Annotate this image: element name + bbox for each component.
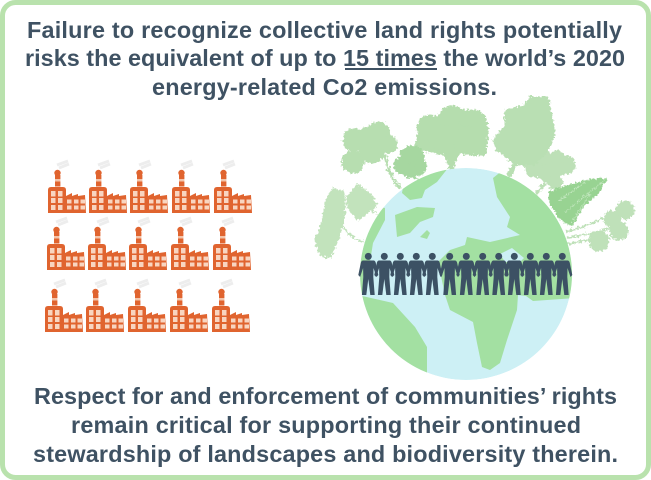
tree: fir bbox=[548, 178, 608, 227]
tree: large centre bbox=[413, 106, 488, 169]
tree: small darker bbox=[394, 146, 426, 179]
trees around the globe bbox=[315, 97, 634, 258]
land: eastern continent bbox=[439, 173, 572, 301]
row of people holding hands bbox=[358, 253, 572, 295]
land: arctic landmass bbox=[402, 170, 447, 200]
closing statement: Respect for and enforcement of communities’ rights bbox=[34, 383, 617, 409]
heading: top statement: Failure to recognize collective land rights potentially bbox=[27, 17, 622, 43]
heading: top statement: energy-related Co2 emissions. bbox=[152, 74, 497, 100]
heading: top statement bbox=[25, 17, 625, 100]
tree: mid right bbox=[525, 151, 575, 194]
tree: tall right bbox=[493, 97, 555, 177]
closing statement: stewardship of landscapes and biodiversity therein. bbox=[33, 441, 618, 467]
land: africa bbox=[445, 295, 518, 370]
heading: top statement: risks the equivalent of up to 15 times the world’s 2020 bbox=[25, 45, 625, 71]
ocean bbox=[360, 168, 572, 380]
land: west edge bbox=[360, 208, 385, 294]
inland sea bbox=[500, 248, 524, 262]
tree: far right bbox=[566, 201, 634, 251]
tree: upper left bbox=[342, 122, 400, 188]
closing statement bbox=[33, 383, 618, 467]
land: central island bbox=[395, 207, 435, 237]
land: south-west continent bbox=[362, 296, 427, 372]
globe bbox=[360, 168, 572, 380]
factory icon grid bbox=[45, 161, 252, 332]
land: small island bbox=[420, 230, 430, 239]
closing statement: remain critical for supporting their continued bbox=[71, 412, 581, 438]
tree: far left bbox=[315, 184, 378, 258]
